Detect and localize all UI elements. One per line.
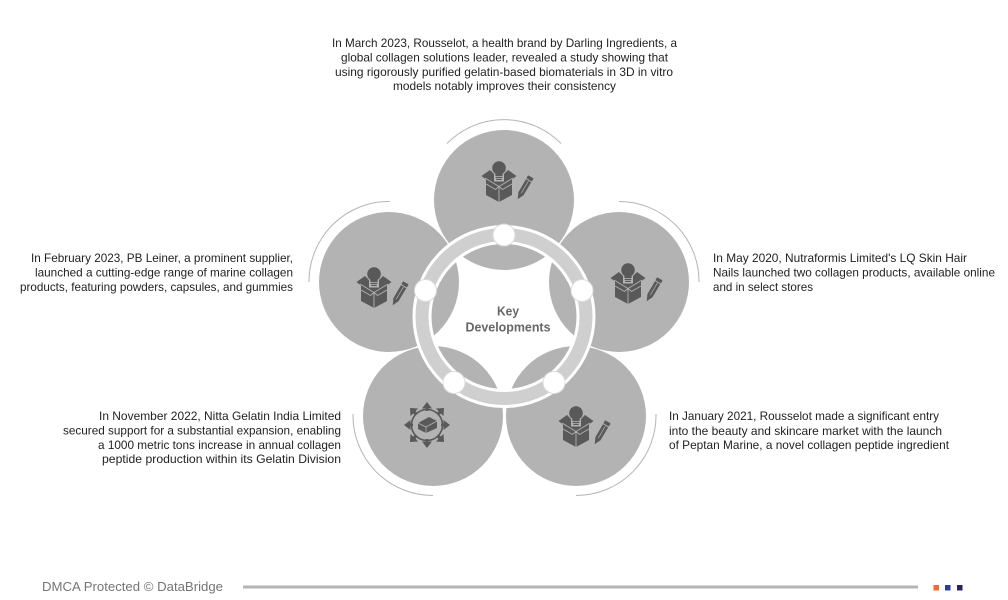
footer — [42, 579, 962, 594]
arc: right — [619, 202, 699, 282]
heading: Key Developments: Developments — [466, 320, 551, 334]
footer text: DMCA Protected © DataBridge — [42, 579, 223, 594]
text block: left: In February 2023, PB Leiner, a prominent supplier, — [31, 252, 293, 265]
panel: left development circle — [309, 201, 459, 352]
panel: top development circle — [434, 120, 574, 270]
arc: top — [447, 120, 561, 144]
text block: left — [20, 252, 293, 294]
node: bottom-right — [543, 372, 565, 394]
icon: idea box and pencil — [610, 263, 663, 304]
circle: left — [319, 212, 459, 352]
icon: idea box and pencil — [356, 267, 409, 308]
node: right — [571, 280, 593, 302]
text block: bottom-left: secured support for a substantial expansion, enabling — [63, 424, 341, 438]
text block: right: In May 2020, Nutraformis Limited's LQ Skin Hair — [713, 252, 967, 265]
text block: top: using rigorously purified gelatin-based biomaterials in 3D in vitro — [335, 66, 673, 79]
text block: bottom-right: In January 2021, Rousselot made a significant entry — [669, 410, 939, 423]
text block: bottom-left: In November 2022, Nitta Gelatin India Limited — [99, 410, 341, 423]
text block: top: global collagen solutions leader, revealed a study showing that — [341, 52, 669, 64]
text block: top: In March 2023, Rousselot, a health brand by Darling Ingredients, a — [332, 37, 678, 50]
text block: bottom-left — [63, 410, 341, 466]
circle: top — [434, 130, 574, 270]
panel: right development circle — [549, 202, 699, 352]
text block: top: models notably improves their consistency — [393, 80, 616, 93]
icon: idea box and pencil — [558, 406, 611, 447]
central ring with nodes — [414, 224, 593, 398]
footer squares — [934, 585, 962, 590]
text block: left: products, featuring powders, capsules, and gummies — [20, 281, 293, 294]
text block: bottom-left: peptide production within its Gelatin Division — [102, 453, 341, 466]
text block: right: Nails launched two collagen products, available online — [713, 266, 995, 280]
circle: bottom-left — [363, 346, 503, 486]
node: top — [493, 224, 515, 246]
footer bar — [243, 586, 918, 588]
heading: Key Developments: Key — [497, 304, 519, 318]
circle: bottom-right — [506, 346, 646, 486]
node: bottom-left — [443, 372, 465, 394]
text block: top — [332, 37, 678, 93]
text block: bottom-right: into the beauty and skincare market with the launch — [669, 425, 942, 438]
text block: bottom-right: of Peptan Marine, a novel collagen peptide ingredient — [669, 439, 950, 452]
icon: box with outward arrows — [404, 402, 450, 448]
text block: right: and in select stores — [713, 281, 813, 294]
panel: bottom-left development circle — [353, 346, 503, 496]
text block: bottom-left: a 1000 metric tons increase in annual collagen — [98, 439, 341, 452]
heading: Key Developments — [466, 304, 551, 334]
text block: right — [713, 252, 995, 294]
icon: idea box and pencil — [482, 161, 534, 202]
node: left — [414, 280, 436, 302]
text block: left: launched a cutting-edge range of marine collagen — [35, 266, 293, 280]
panel: bottom-right development circle — [506, 346, 656, 496]
text block: bottom-right — [669, 410, 950, 452]
arc: bottom-right — [576, 414, 656, 496]
arc: bottom-left — [353, 414, 433, 496]
circle: right — [549, 212, 689, 352]
arc: left — [309, 201, 390, 282]
